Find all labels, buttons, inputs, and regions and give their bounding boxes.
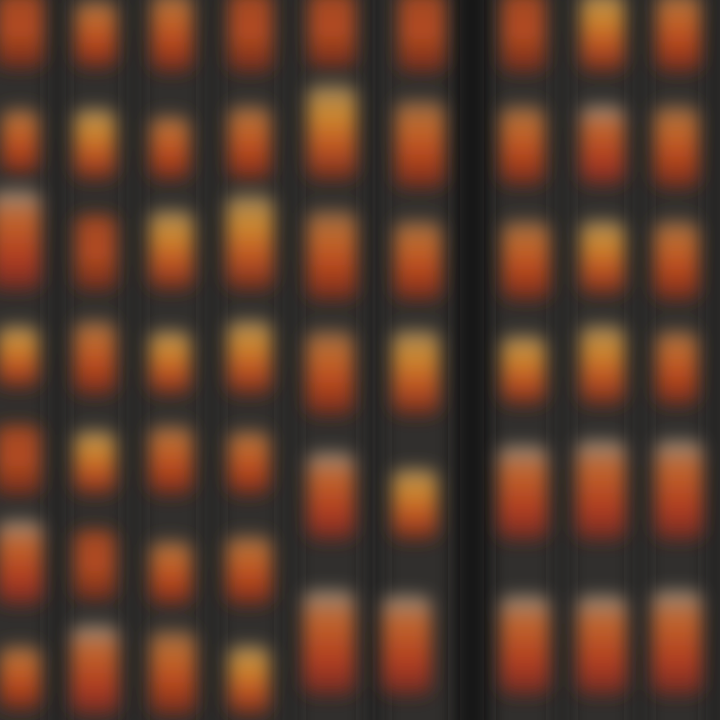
row 1	[0, 0, 700, 72]
row 3	[0, 190, 698, 300]
row 4	[0, 320, 697, 415]
row 7	[0, 590, 701, 715]
row 5	[0, 425, 702, 540]
row 6	[0, 520, 271, 605]
row 2	[2, 85, 698, 188]
